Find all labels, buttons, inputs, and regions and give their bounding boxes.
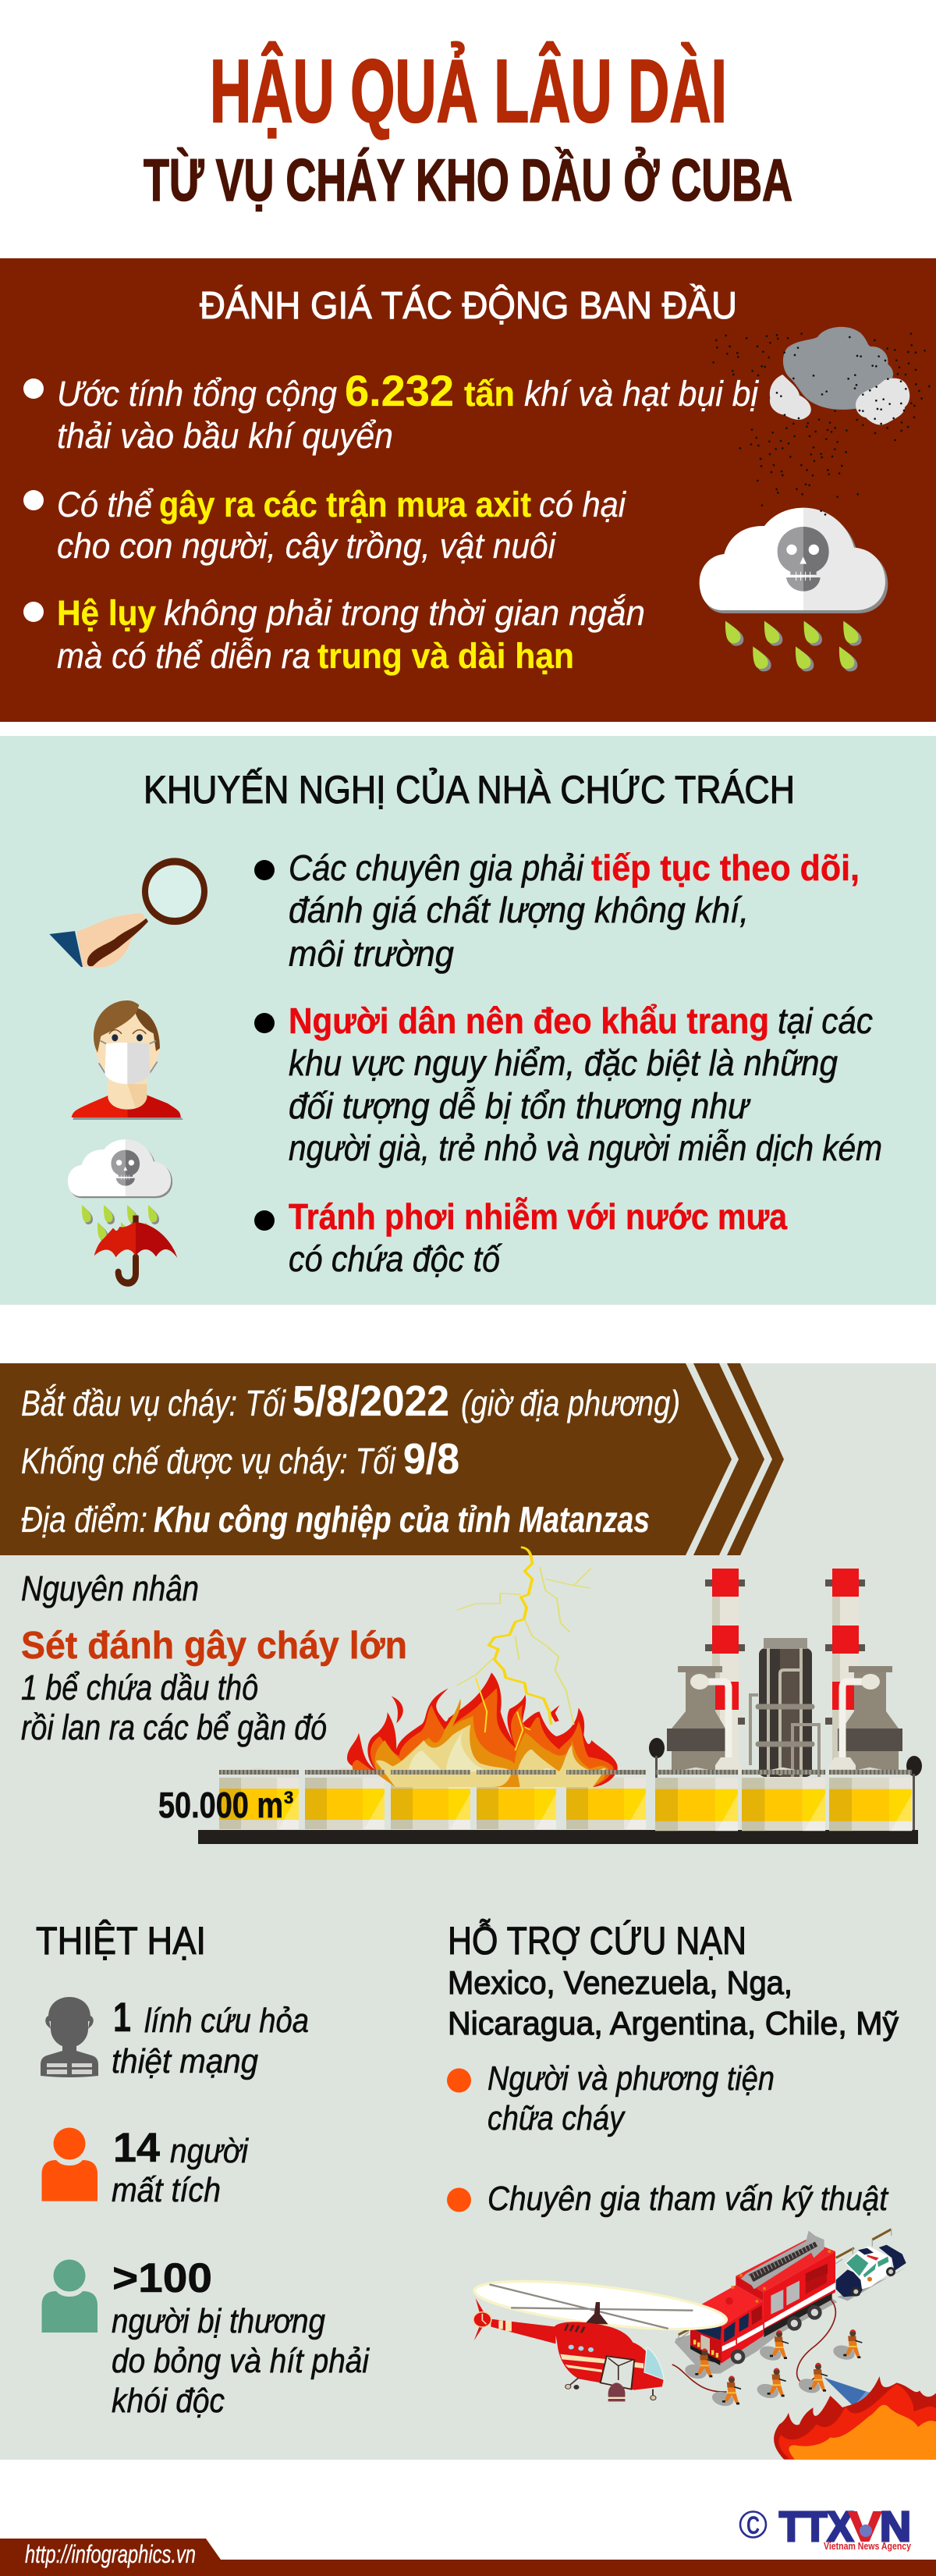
stat: missing: mất tích xyxy=(112,2171,221,2209)
illustration: tank rails through flames xyxy=(305,1770,646,1775)
bullet: emissions: thải vào bầu khí quyển xyxy=(57,416,393,456)
text: location xyxy=(21,1499,650,1540)
stat: injured xyxy=(112,2255,370,2420)
illustration: police car xyxy=(836,2230,906,2301)
text: supporting countries xyxy=(448,1964,899,2041)
stat: missing xyxy=(112,2125,249,2209)
stat: missing: người xyxy=(170,2132,249,2170)
illustration: lightning xyxy=(456,1547,590,1750)
bullet: monitoring: đánh giá chất lượng không khí, xyxy=(289,890,749,930)
logo: TTXVN: N xyxy=(880,2503,911,2550)
heading: initial assessment: ĐÁNH GIÁ TÁC ĐỘNG BAN ĐẦU xyxy=(200,285,737,327)
heading: rescue support: HỖ TRỢ CỨU NẠN xyxy=(448,1919,746,1963)
heading: casualties: THIỆT HẠI xyxy=(36,1919,206,1963)
chimney left xyxy=(705,1569,745,1773)
bullet: monitoring: môi trường xyxy=(289,933,454,974)
icon: toxic cloud with acid rain xyxy=(68,1139,172,1242)
bullet: people and vehicles xyxy=(447,2059,775,2137)
bullet: acid rain xyxy=(23,485,627,566)
bullet: avoid toxic rain: Tránh phơi nhiễm với nước mưa xyxy=(289,1196,787,1237)
bullet: wear masks: tại các xyxy=(778,1000,873,1041)
illustration: refinery towers xyxy=(649,1569,922,1830)
bullet: monitoring xyxy=(254,847,860,974)
illustration: flames xyxy=(347,1672,618,1787)
stat: missing: 14 xyxy=(113,2125,161,2171)
bullet: emissions: khí và hạt bụi bị xyxy=(524,374,760,414)
logo: TTXVN: V xyxy=(849,2503,881,2550)
text: cause: 1 bể chứa dầu thô xyxy=(21,1668,258,1707)
bullet: long-term effects xyxy=(23,593,645,676)
chimney right xyxy=(825,1569,865,1773)
bullet: acid rain: gây ra các trận mưa axit xyxy=(159,485,531,524)
bullet: long-term effects: mà có thể diễn ra xyxy=(57,636,310,676)
bullet: long-term effects: Hệ lụy xyxy=(57,593,156,633)
stat: injured: khói độc xyxy=(112,2382,225,2420)
icon: person wearing face mask xyxy=(72,1000,183,1120)
text: location: Khu công nghiệp của tỉnh Matanzas xyxy=(154,1499,650,1540)
text: supporting countries: Mexico, Venezuela, Nga, xyxy=(448,1964,792,2001)
logo: TTXVN: Vietnam News Agency xyxy=(824,2540,912,2552)
icon: injured person xyxy=(42,2260,98,2333)
bullet: wear masks: Người dân nên đeo khẩu trang xyxy=(289,1000,769,1041)
illustration: helicopter xyxy=(472,2272,729,2401)
label: tank volume: 50.000 m xyxy=(158,1785,283,1825)
bullet: emissions: 6.232 xyxy=(345,366,454,415)
illustration: water spray and fire xyxy=(774,2376,936,2460)
icon: magnifying glass in hand xyxy=(49,862,204,968)
text: start date: Bắt đầu vụ cháy: Tối xyxy=(21,1383,286,1423)
text: start date: (giờ địa phương) xyxy=(461,1383,680,1423)
bullet: acid rain: cho con người, cây trồng, vật nuôi xyxy=(57,526,557,566)
text: control date: 9/8 xyxy=(403,1434,459,1483)
text: cause: rồi lan ra các bể gần đó xyxy=(21,1707,327,1747)
bullet: wear masks: đối tượng dễ bị tổn thương như xyxy=(289,1085,751,1126)
section: rescue support xyxy=(447,1919,936,2460)
stat: injured: do bỏng và hít phải xyxy=(112,2342,370,2380)
section: casualties xyxy=(36,1919,370,2420)
text: start date xyxy=(21,1377,680,1425)
stat: injured: người bị thương xyxy=(112,2302,325,2340)
stat: firefighter killed: lính cứu hỏa xyxy=(144,2002,309,2040)
illustration: firefighters xyxy=(683,2329,862,2408)
stat: firefighter killed: thiệt mạng xyxy=(112,2042,258,2080)
icon: umbrella xyxy=(94,1216,177,1283)
bullet: acid rain: Có thể xyxy=(57,485,154,524)
text: supporting countries: Nicaragua, Argentina, Chile, Mỹ xyxy=(448,2005,899,2041)
bullet: wear masks: khu vực nguy hiểm, đặc biệt là những xyxy=(289,1043,838,1083)
text: start date: 5/8/2022 xyxy=(292,1377,449,1425)
text: cause xyxy=(21,1569,407,1747)
vessel right xyxy=(829,1666,902,1775)
illustration: oil tanks xyxy=(198,1768,918,1844)
bullet: emissions xyxy=(23,366,760,456)
text: control date: Khống chế được vụ cháy: Tối xyxy=(21,1441,396,1481)
bullet: technical experts: Chuyên gia tham vấn kỹ thuật xyxy=(488,2180,889,2218)
bullet: avoid toxic rain xyxy=(254,1196,787,1279)
bullet: monitoring: tiếp tục theo dõi, xyxy=(591,847,860,888)
bullet: emissions: tấn xyxy=(464,374,515,414)
illustration: fire truck xyxy=(675,2230,854,2374)
logo: TTXVN: TTX xyxy=(779,2503,853,2550)
bullet: emissions: Ước tính tổng cộng xyxy=(57,374,337,414)
text: cause: Nguyên nhân xyxy=(21,1569,199,1608)
icon: missing person xyxy=(42,2127,98,2201)
stat: injured: >100 xyxy=(112,2255,212,2301)
footer: website band xyxy=(0,2539,936,2576)
logo: TTXVN xyxy=(740,2503,912,2552)
label: tank volume: 3 xyxy=(284,1788,293,1807)
text: location: Địa điểm: xyxy=(21,1499,147,1540)
icon: firefighter xyxy=(41,1997,98,2077)
panel: incident details and damage xyxy=(0,1363,936,2460)
bullet: people and vehicles: Người và phương tiện xyxy=(488,2059,775,2098)
bullet: monitoring: Các chuyên gia phải xyxy=(289,847,585,888)
icon: smoke clouds and dust particles xyxy=(714,327,929,506)
logo: TTXVN: C xyxy=(746,2511,760,2539)
stat: firefighter killed xyxy=(112,1995,309,2080)
text: cause: Sét đánh gây cháy lớn xyxy=(21,1625,407,1667)
bullet: avoid toxic rain: có chứa độc tố xyxy=(289,1238,502,1279)
heading: recommendations: KHUYẾN NGHỊ CỦA NHÀ CHỨC TRÁCH xyxy=(144,767,795,812)
bullet: wear masks xyxy=(254,1000,882,1168)
banner: fire timeline arrow xyxy=(0,1363,784,1555)
bullet: acid rain: có hại xyxy=(539,485,627,524)
signal posts xyxy=(649,1738,922,1830)
bullet: long-term effects: trung và dài hạn xyxy=(317,636,574,676)
stat: firefighter killed: 1 xyxy=(113,1995,131,2041)
illustration: fire hoses xyxy=(672,2300,835,2392)
panel: recommendations from authorities xyxy=(0,736,936,1305)
bullet: long-term effects: không phải trong thời gian ngắn xyxy=(164,593,645,633)
title xyxy=(144,42,792,214)
footer: website band: http://infographics.vn xyxy=(25,2540,196,2568)
bullet: people and vehicles: chữa cháy xyxy=(488,2099,626,2137)
vessel left xyxy=(667,1666,741,1775)
panel: initial impact assessment xyxy=(0,258,936,722)
icon: toxic rain cloud with skull xyxy=(700,508,888,671)
